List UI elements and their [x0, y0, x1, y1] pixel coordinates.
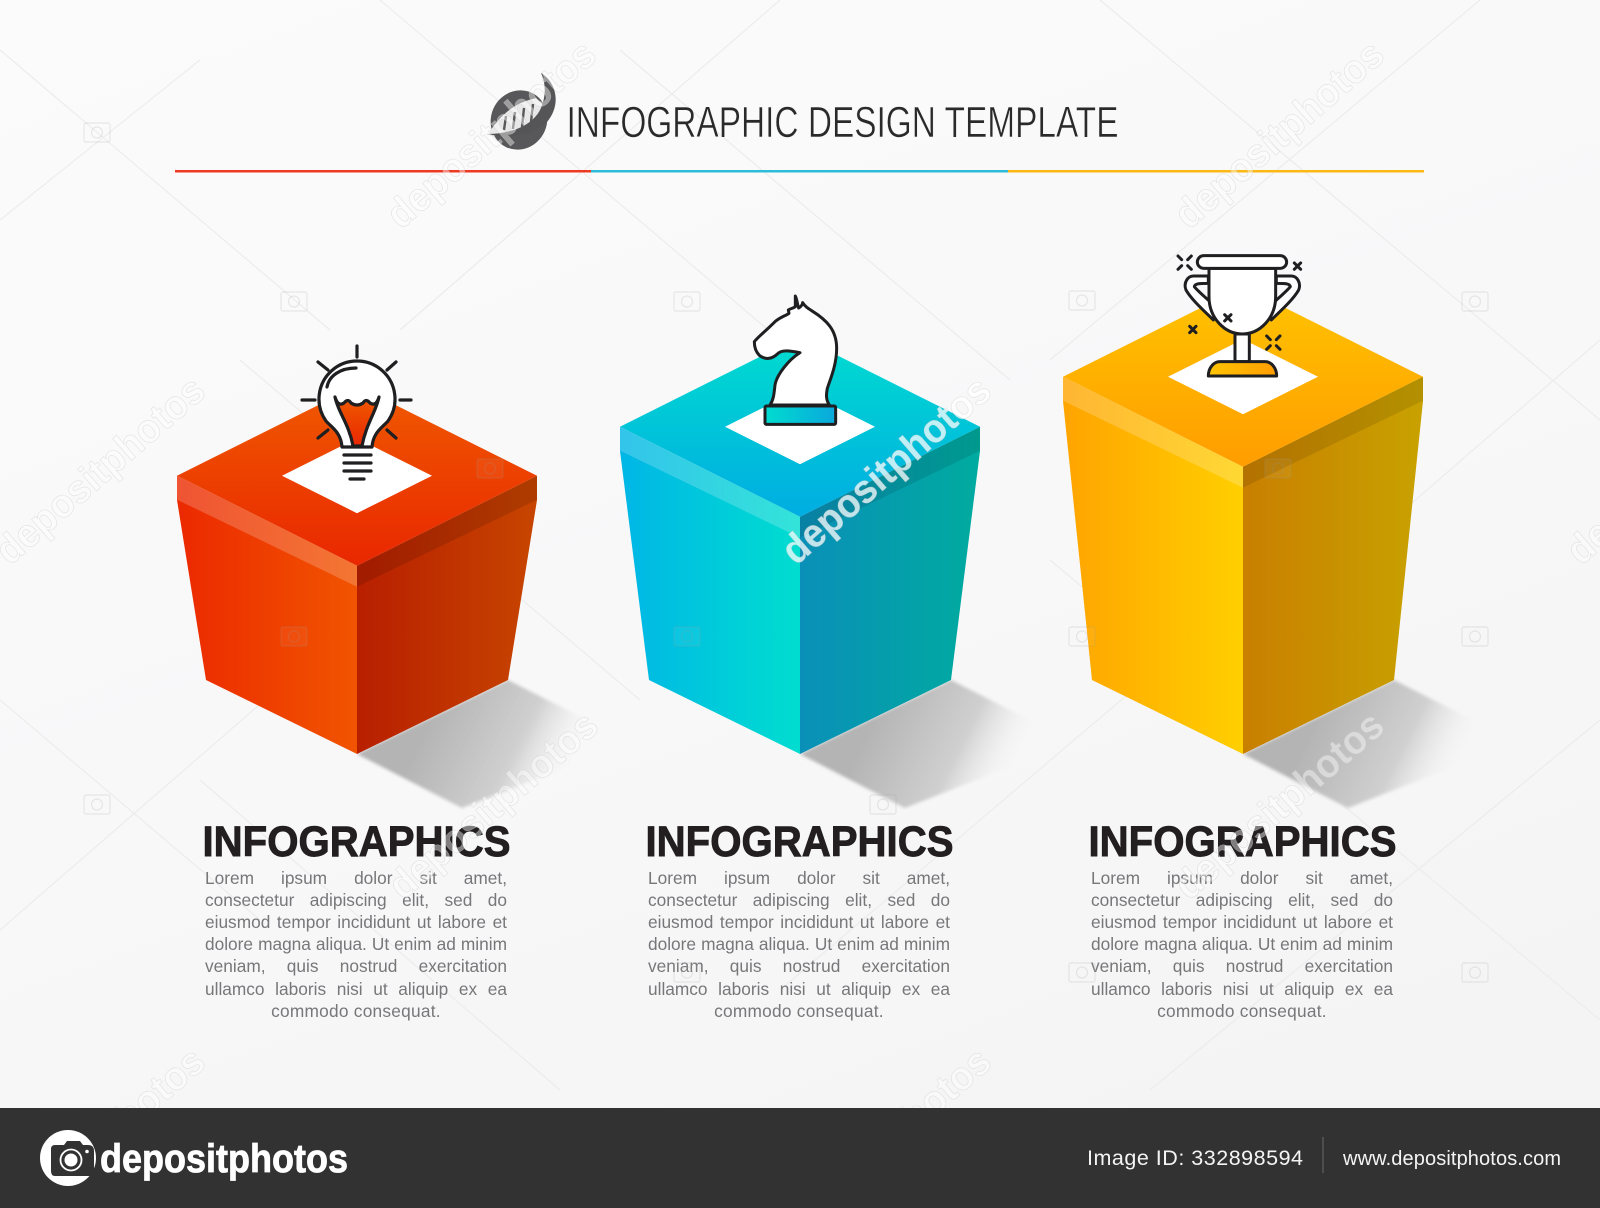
icon: light bulb [302, 346, 411, 479]
depositphotos watermarks: depositphotos [773, 368, 1000, 573]
footer separator [1322, 1137, 1324, 1173]
body text: column 1: consectetur adipiscing elit, sed do [205, 890, 507, 910]
white diamond: teal box [725, 389, 875, 464]
dark band: teal box [800, 427, 980, 538]
header rule [175, 170, 1424, 172]
website url: www.depositphotos.com [1342, 1148, 1561, 1170]
shadow: amber box [1243, 680, 1516, 808]
body text: column 2: veniam, quis nostrud exercitation [648, 956, 950, 976]
body text: column 3 [1091, 868, 1393, 1021]
shadow: teal box [800, 680, 1073, 808]
column 2: teal box [620, 337, 1073, 808]
body text: column 1: ullamco laboris nisi ut aliquip ex ea [205, 979, 507, 999]
body text: column 1: veniam, quis nostrud exercitation [205, 956, 507, 976]
highlight band: teal box [620, 427, 800, 538]
dark band: amber box [1243, 377, 1423, 488]
body text: column 2: eiusmod tempor incididunt ut labore et [648, 912, 950, 932]
body text: column 1 [205, 868, 507, 1021]
icon: trophy [1178, 256, 1301, 376]
right face: teal box [800, 427, 980, 754]
body text: column 3: veniam, quis nostrud exercitation [1091, 956, 1393, 976]
dark band: red box [357, 476, 537, 587]
heading: column 2: INFOGRAPHICS [646, 818, 954, 866]
body text: column 3: eiusmod tempor incididunt ut labore et [1091, 912, 1393, 932]
depositphotos watermarks: depositphotos [1166, 32, 1393, 237]
depositphotos watermarks: depositphotos [378, 32, 605, 237]
body text: column 3: Lorem ipsum dolor sit amet, [1091, 868, 1393, 888]
white diamond: amber box [1168, 339, 1318, 414]
left face: red box [177, 476, 357, 754]
body text: column 3: consectetur adipiscing elit, sed do [1091, 890, 1393, 910]
column 3: amber box [1063, 287, 1516, 808]
top face: amber box [1063, 287, 1423, 467]
body text: column 3: dolore magna aliqua. Ut enim ad minim [1091, 934, 1393, 954]
body text: column 1: Lorem ipsum dolor sit amet, [205, 868, 507, 888]
body text: column 1: dolore magna aliqua. Ut enim ad minim [205, 934, 507, 954]
title: INFOGRAPHIC DESIGN TEMPLATE [566, 98, 1118, 147]
footer logo wordmark: depositphotos [100, 1137, 348, 1181]
left face: teal box [620, 427, 800, 754]
body text: column 2: consectetur adipiscing elit, sed do [648, 890, 950, 910]
depositphotos watermarks: depositphotos [380, 703, 607, 908]
body text: column 2: dolore magna aliqua. Ut enim ad minim [648, 934, 950, 954]
heading: column 1: INFOGRAPHICS [202, 818, 510, 866]
body text: column 2 [648, 868, 950, 1021]
body text: column 1: eiusmod tempor incididunt ut labore et [205, 912, 507, 932]
body text: column 3: commodo consequat. [1157, 1001, 1327, 1021]
shadow: red box [357, 680, 630, 808]
column 1: red box [177, 386, 630, 808]
camera watermarks [84, 123, 1488, 982]
body text: column 2: Lorem ipsum dolor sit amet, [648, 868, 950, 888]
top face: teal box [620, 337, 980, 517]
right face: red box [357, 476, 537, 754]
footer bar [0, 1108, 1600, 1208]
footer logo icon [40, 1130, 96, 1186]
icon: chess knight [754, 296, 837, 424]
image id: Image ID: 332898594 [1087, 1146, 1303, 1170]
top face: red box [177, 386, 537, 566]
highlight band: amber box [1063, 377, 1243, 488]
header logo mark [481, 73, 557, 159]
body text: column 3: ullamco laboris nisi ut aliquip ex ea [1091, 979, 1393, 999]
body text: column 2: ullamco laboris nisi ut aliquip ex ea [648, 979, 950, 999]
left face: amber box [1063, 377, 1243, 754]
body text: column 2: commodo consequat. [714, 1001, 884, 1021]
white diamond: red box [282, 438, 432, 513]
highlight band: red box [177, 476, 357, 587]
depositphotos watermarks: depositphotos [1166, 703, 1393, 908]
body text: column 1: commodo consequat. [271, 1001, 441, 1021]
heading: column 3: INFOGRAPHICS [1088, 818, 1396, 866]
right face: amber box [1243, 377, 1423, 754]
